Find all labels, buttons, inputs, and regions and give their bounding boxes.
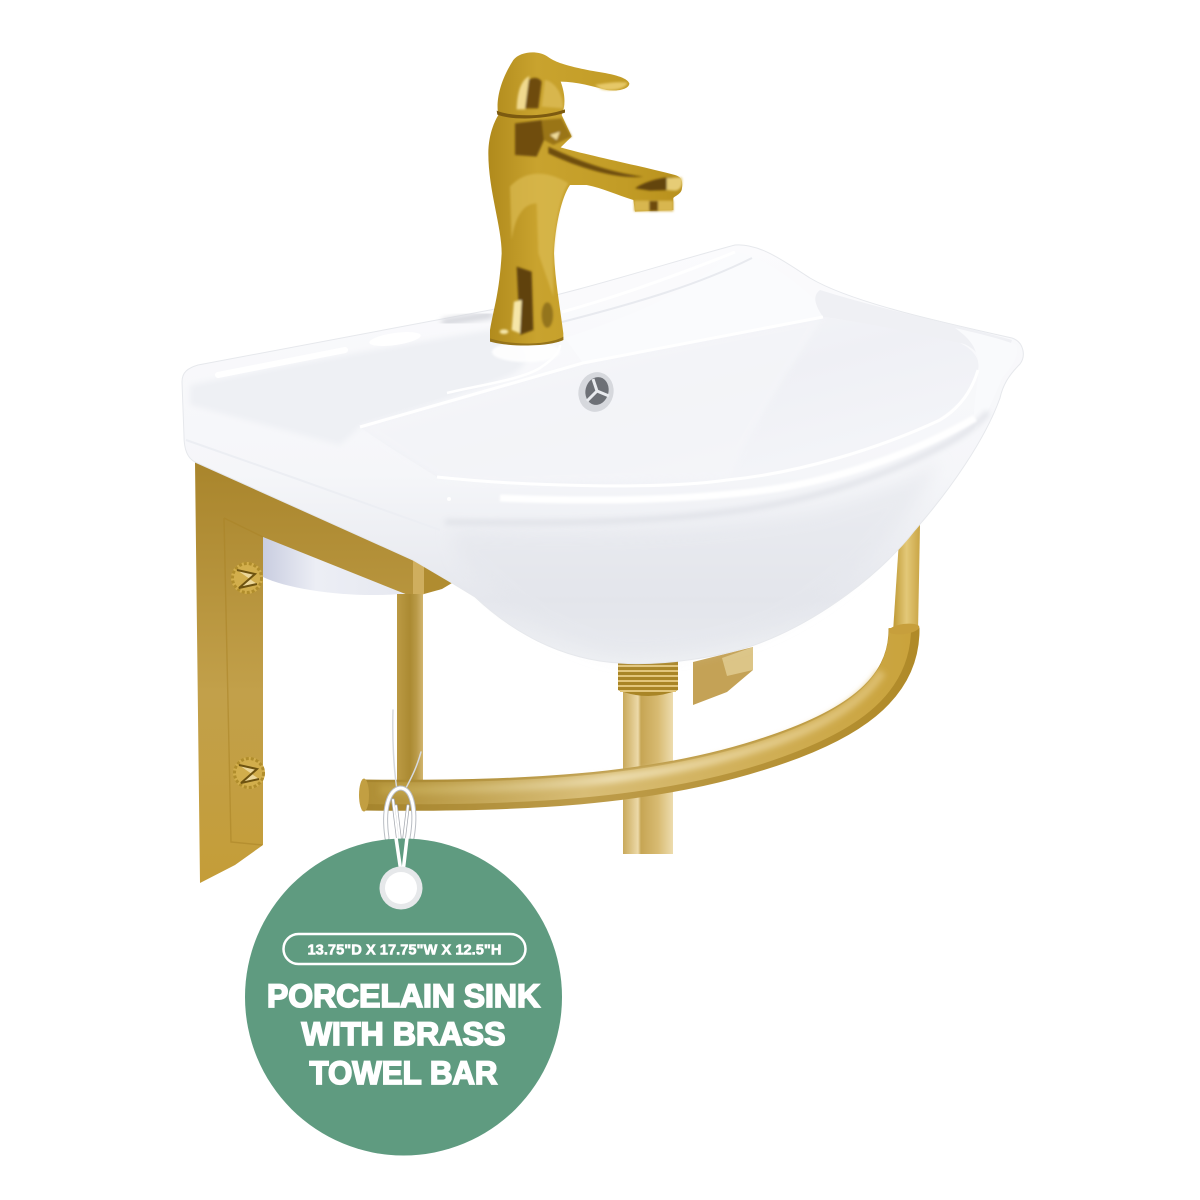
deck shading — [190, 330, 525, 445]
size pill: 13.75"D X 17.75"W X 12.5"H — [308, 942, 502, 958]
right rim lip — [955, 328, 1017, 430]
rear bracket under the bowl — [693, 647, 753, 705]
towel bar — [359, 622, 920, 812]
overflow drain — [574, 368, 618, 416]
deck curve around faucet — [447, 345, 560, 393]
left towel bar leg — [397, 594, 423, 786]
interior plane change — [360, 317, 823, 483]
size pill — [284, 934, 526, 964]
hang tag — [245, 838, 562, 1156]
faucet body — [488, 52, 682, 344]
faucet base reflection — [492, 342, 560, 362]
porcelain basin — [182, 245, 1023, 664]
tag headline: WITH BRASS — [302, 1016, 506, 1052]
gold faucet — [488, 52, 682, 345]
right towel bar upright — [893, 525, 920, 632]
under-rim shadow — [445, 412, 988, 523]
tag headline: PORCELAIN SINK — [267, 978, 541, 1014]
left wall bracket — [195, 462, 452, 883]
tag string — [386, 710, 421, 872]
tag headline: TOWEL BAR — [310, 1055, 498, 1091]
drain pipe with threaded tailpiece — [618, 660, 678, 854]
screw: lower — [233, 757, 265, 789]
rear right recess — [815, 290, 1012, 375]
background shadow: rear underside of basin — [263, 537, 440, 595]
basin body — [182, 245, 1023, 664]
rear deck — [565, 252, 823, 363]
tag string over disc — [396, 838, 407, 872]
tag disc — [245, 838, 562, 1156]
faucet reflections — [500, 76, 682, 335]
basin interior — [360, 317, 979, 486]
rim highlights — [360, 317, 823, 427]
eyelet — [380, 866, 422, 910]
screw: upper — [231, 562, 263, 594]
tag headline — [267, 978, 541, 1091]
basin shading — [450, 460, 940, 657]
